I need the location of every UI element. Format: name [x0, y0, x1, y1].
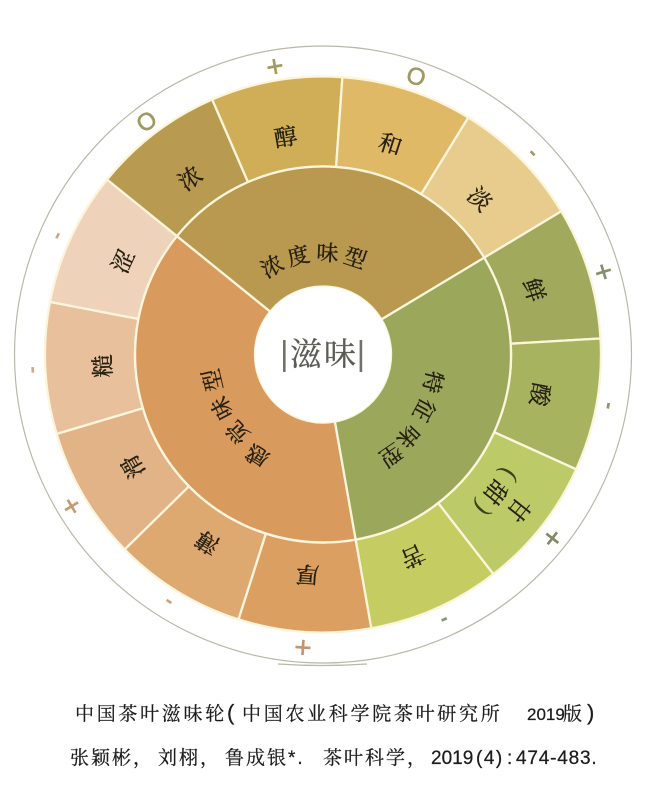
outer band: concentration tastes	[107, 77, 561, 258]
wedge: 浓	[107, 100, 248, 236]
outer band: tactile tastes	[45, 180, 371, 633]
caption line 1: 中国农业科学院茶叶研究所	[242, 703, 502, 725]
outer band: characteristic tastes	[356, 211, 601, 628]
intensity markers: -	[597, 400, 623, 412]
intensity markers: O	[403, 61, 429, 93]
wedge: 滑: 滑	[117, 450, 150, 482]
wedge: 鲜	[484, 211, 600, 344]
inner segment: 特征味型: 型	[375, 438, 407, 471]
wedge: 和	[336, 77, 468, 194]
intensity markers: -	[158, 590, 178, 616]
wedge: 甘（甜）: (	[495, 463, 525, 487]
intensity markers	[18, 49, 623, 664]
wedge: 滑	[57, 408, 189, 549]
wedge: 甘（甜）	[438, 432, 576, 574]
intensity markers: +	[534, 521, 570, 555]
caption line 1: 2019	[527, 705, 565, 724]
intensity markers: +	[293, 630, 313, 664]
wedge: 苦	[356, 503, 493, 628]
center label: 滋味	[255, 286, 391, 422]
wedge: 浓: 浓	[174, 162, 207, 196]
wedge: 薄: 薄	[191, 525, 224, 559]
intensity markers: +	[585, 259, 621, 285]
wedge: 薄	[125, 486, 266, 619]
inner segment: 感觉味型: 型	[198, 366, 228, 393]
intensity markers: +	[53, 490, 91, 522]
wedge: 淡	[421, 118, 561, 258]
caption line 2: :	[507, 748, 512, 769]
wedge: 酸: 酸	[525, 381, 554, 409]
inner segment: 感觉味型: 觉	[221, 415, 255, 449]
intensity markers: +	[264, 49, 286, 85]
inner segment: 浓度味型: 度	[285, 241, 312, 271]
center label: 滋味: 味	[324, 336, 356, 372]
center label: 滋味: 滋	[290, 336, 322, 372]
caption line 2: 474-483.	[516, 748, 597, 769]
inner segment: 浓度味型: 味	[316, 240, 339, 266]
inner segment: 浓度味型: 浓	[256, 250, 288, 283]
inner segment: 特征味型: 味	[392, 420, 425, 453]
wedge: 甘（甜）: 甘	[501, 492, 535, 526]
wedge: 甘（甜）: 甜	[478, 475, 512, 509]
caption line 1: 中国茶叶滋味轮	[75, 703, 227, 725]
inner segment: 浓度味型: 型	[341, 243, 370, 274]
inner segment: 浓度味型	[177, 166, 484, 320]
caption line 2: 张颖彬，	[70, 747, 154, 769]
caption line 2: 刘栩，	[158, 747, 221, 769]
caption line 2: 茶叶科学，	[323, 747, 428, 769]
outer ring	[14, 46, 632, 666]
caption line 1: )	[587, 700, 594, 725]
intensity markers: O	[131, 106, 163, 138]
inner segment: 感觉味型: 味	[206, 392, 239, 424]
wedge: 醇	[212, 77, 342, 182]
caption line 2: 2019	[431, 748, 473, 769]
inner segment: 感觉味型	[135, 236, 356, 542]
wedge: 苦: 苦	[397, 539, 428, 572]
wedge: 涩: 涩	[107, 246, 140, 277]
wedge: 甘（甜）: )	[469, 495, 497, 523]
wedge: 鲜: 鲜	[518, 276, 549, 305]
wedge: 酸	[494, 338, 601, 469]
inner segment: 特征味型	[335, 258, 511, 540]
caption line 1	[75, 700, 594, 725]
wedge: 糙	[45, 302, 143, 434]
caption line 1: (	[227, 700, 235, 725]
intensity markers: -	[18, 366, 44, 374]
wedge: 淡: 淡	[462, 183, 496, 217]
inner segment: 特征味型: 征	[408, 394, 440, 426]
caption line 2	[70, 747, 597, 769]
caption line 1: 版	[563, 703, 582, 725]
inner segment: 感觉味型: 感	[242, 439, 274, 472]
intensity markers: -	[522, 141, 546, 163]
wedge: 糙: 糙	[90, 354, 116, 378]
wedge: 和: 和	[375, 130, 405, 160]
caption line 2: 鲁成银*.	[225, 747, 305, 769]
caption line 2: (4)	[476, 748, 504, 769]
wedge: 醇: 醇	[272, 123, 299, 152]
intensity markers: -	[436, 608, 454, 634]
inner segment: 特征味型: 特	[418, 368, 447, 396]
wedge: 厚: 厚	[295, 561, 320, 587]
wedge: 厚	[238, 534, 371, 633]
wedge: 涩	[50, 180, 177, 319]
intensity markers: -	[43, 226, 69, 244]
